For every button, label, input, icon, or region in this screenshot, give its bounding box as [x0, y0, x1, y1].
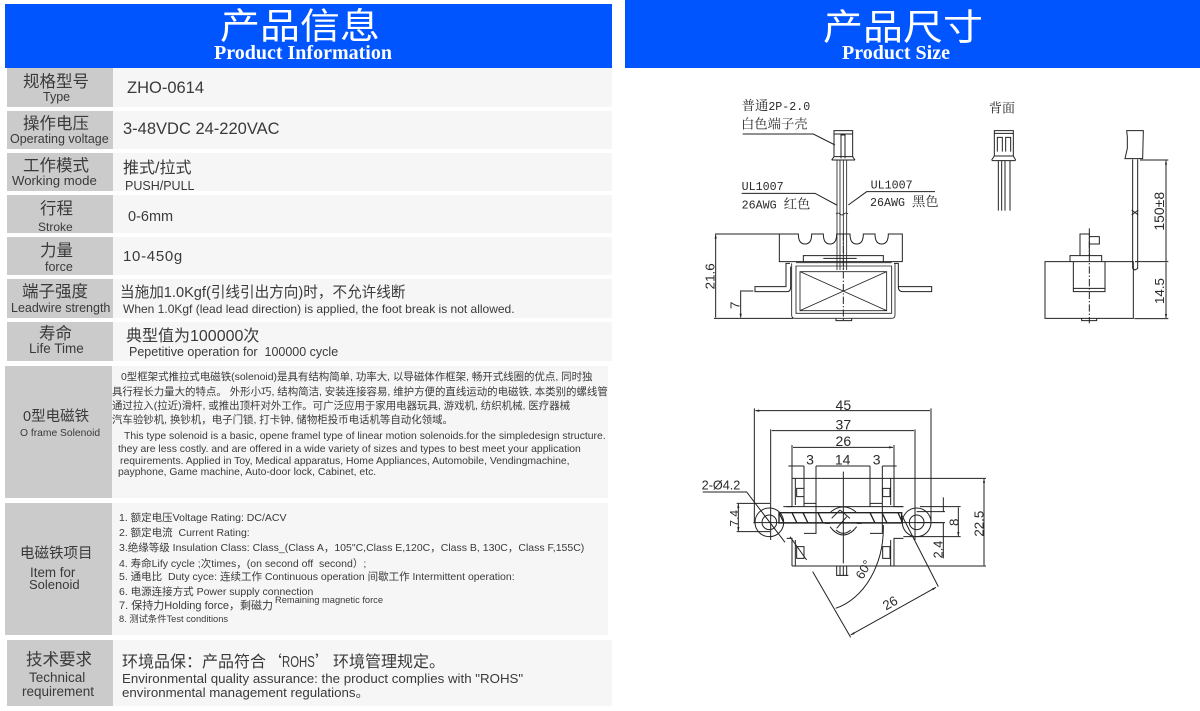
wires [836, 160, 848, 270]
list of items: Remaining magnetic force [275, 595, 383, 605]
frame and coil [755, 263, 932, 318]
row: life time: 典型值为100000次 [126, 328, 259, 345]
dimension: 45, 37, 26, 3, 14: 3 [873, 451, 881, 467]
row: leadwire strength [7, 279, 612, 318]
hatched bar and plunger [753, 472, 943, 563]
row: stroke: 0-6mm [128, 209, 173, 225]
row: type: 规格型号 [23, 73, 89, 91]
dimension: 45, 37, 26, 3, 14: 37 [836, 416, 851, 432]
dimension: 21.6 and 7: 7 [727, 302, 742, 309]
dimension: 21.6 and 7 [703, 234, 793, 318]
list of items: 5. 通电比 Duty cyce: 连续工作 Continuous operation 间歇工作 Intermittent operation: [119, 571, 515, 583]
row: technical requirement: Environmental quality assurance: the product complies with "ROHS" [122, 671, 523, 686]
row: operating voltage: 操作电压 [23, 115, 89, 133]
dimension: 22.5, 8, 2.4 [894, 478, 986, 566]
list of items: 2. 额定电流 Current Rating: [119, 527, 250, 539]
back connector [992, 131, 1016, 211]
row: life time: Pepetitive operation for 100000 cycle [129, 345, 338, 359]
dimension: 22.5, 8, 2.4: 8 [946, 519, 961, 526]
row: operating voltage: Operating voltage [10, 132, 109, 146]
label: terminal housing: 普通2P-2.0 [742, 95, 810, 114]
description text [112, 371, 608, 478]
mounting ears [755, 508, 931, 537]
row: technical requirement: ROHS [282, 654, 315, 671]
dimension: 150 and 14.5 [1134, 160, 1168, 319]
dimension: 45, 37, 26, 3, 14: 3 [806, 451, 814, 467]
row: item for solenoid: Item for [30, 565, 75, 580]
dimension: hole and 7.4: 2-Ø4.2 [702, 478, 740, 492]
label: black wire: UL1007 [871, 178, 913, 192]
dimension: hole and 7.4: 7.4 [727, 510, 741, 527]
row: technical requirement: Technical [29, 670, 85, 685]
panel: product size header: Product Size [842, 42, 950, 64]
description text: This type solenoid is a basic, opene framel type of linear motion solenoids.for the simpledesign structure. [124, 431, 606, 442]
row: life time: Life Time [29, 341, 84, 356]
row: technical requirement [7, 640, 612, 706]
list of items [119, 512, 584, 624]
dimension: 45, 37, 26, 3, 14: 45 [836, 397, 851, 413]
row: technical requirement: 环境品保：产品符合 环境管理规定。 [122, 654, 445, 671]
label: terminal housing: 白色端子壳 [741, 113, 808, 132]
dimension: 45, 37, 26, 3, 14: 14 [835, 451, 851, 467]
row: technical requirement: 技术要求 [26, 651, 92, 669]
dimension: 150 and 14.5: 150±8 [1151, 192, 1167, 231]
label: terminal housing [741, 95, 835, 145]
dimension: 22.5, 8, 2.4: 2.4 [931, 541, 945, 558]
label: black wire: 26AWG 黑色 [870, 191, 939, 210]
label: black wire [848, 178, 939, 210]
dimension: 150 and 14.5: 14.5 [1152, 278, 1167, 304]
row: technical requirement: ’ [315, 648, 331, 672]
description text: 汽车验钞机, 换钞机，电子门锁, 打卡钟, 储物柜投币电话机等自动化领域。 [112, 415, 453, 426]
dimension: 21.6 and 7: 21.6 [703, 263, 718, 289]
label: red wire: UL1007 [742, 180, 784, 194]
drawing: back and side views [989, 98, 1168, 323]
row: item for solenoid: 电磁铁项目 [20, 546, 92, 562]
list of items: 7. 保持力Holding force，剩磁力 [119, 600, 273, 612]
panel: product information header: Product Information [214, 42, 392, 64]
side block [1045, 228, 1133, 323]
row: leadwire strength: 当施加1.0Kgf(引线引出方向)时，不允许线断 [120, 285, 405, 301]
row: force: 力量 [40, 242, 73, 260]
dimension: 45, 37, 26, 3, 14 [754, 397, 931, 540]
row: force: 10-450g [123, 248, 183, 265]
row: O frame solenoid: O frame Solenoid [20, 428, 100, 439]
row: life time: 寿命 [39, 325, 72, 343]
row: working mode: 工作模式 [23, 157, 89, 175]
row: stroke: 行程 [40, 200, 73, 218]
row: O frame solenoid [5, 366, 608, 498]
row: item for solenoid [5, 503, 608, 635]
row: leadwire strength: When 1.0Kgf (lead lead direction) is applied, the foot break is not allowed. [123, 302, 515, 316]
body outline [787, 466, 903, 576]
description text: 通过拉入(拉近)滑杆, 或推出顶杆对外工作。可广泛应用于家用电器玩具, 游戏机, 纺织机械, 医疗器械 [112, 401, 570, 412]
bobbin top [779, 234, 902, 262]
description text: 具行程长力量大的特点。 外形小巧, 结构简洁, 安装连接容易, 维护方便的直线运动的电磁铁, 本类别的螺线管 [112, 387, 608, 398]
row: type: Type [43, 90, 70, 104]
description text: requirements. Applied in Toy, Medical apparatus, Home Appliances, Automobile, Vendingmachine, [120, 456, 570, 467]
drawing: front view [703, 95, 939, 322]
row: technical requirement: ‘ [266, 648, 282, 672]
panel: product size header [625, 0, 1200, 68]
centerline and nub [836, 233, 852, 322]
panel: product information header [5, 4, 612, 68]
description text: 0型框架式推拉式电磁铁(solenoid)是具有结构简单, 功率大, 以导磁体作框架, 畅开式线圈的优点, 同时独 [121, 372, 592, 383]
description text: they are less costly. and are offered in a wide variety of sizes and types to best meet your application [118, 444, 581, 455]
row: working mode: 推式/拉式 [123, 160, 191, 177]
list of items: 8. 测试条件Test conditions [119, 614, 228, 624]
row: leadwire strength: Leadwire strength [11, 301, 110, 315]
row: operating voltage: 3-48VDC 24-220VAC [123, 120, 280, 138]
list of items: 4. 寿命Lify cycle ;次times，(on second off second）; [119, 558, 366, 570]
row: operating voltage [7, 111, 612, 149]
row: stroke: Stroke [38, 220, 73, 234]
dimension: 22.5, 8, 2.4: 22.5 [971, 511, 986, 537]
row: type [7, 68, 612, 107]
list of items: 6. 电源连接方式 Power supply connection [119, 586, 313, 598]
row: O frame solenoid: 0型电磁铁 [23, 409, 89, 425]
row: working mode [7, 153, 612, 191]
dimension: hole and 7.4 [702, 478, 785, 542]
side connector [1125, 131, 1143, 270]
row: item for solenoid: Solenoid [29, 577, 80, 592]
row: working mode: PUSH/PULL [125, 179, 194, 193]
label: red wire: 26AWG 红色 [742, 193, 810, 212]
drawing: top view [702, 397, 986, 637]
dimension: 60 degrees and 26: 26 [880, 593, 900, 613]
row: technical requirement: environmental management regulations。 [122, 685, 369, 700]
connector [832, 131, 855, 160]
row: technical requirement: requirement [22, 684, 94, 699]
list of items: 3.绝缘等级 Insulation Class: Class_(Class A，105"C,Class E,120C，Class B, 130C，Class F,155C) [119, 542, 584, 554]
label: back: 背面 [989, 98, 1015, 117]
row: force: force [45, 260, 73, 274]
description text: payphone, Game machine, Auto-door lock, Cabinet, etc. [118, 467, 376, 478]
list of items: 1. 额定电压Voltage Rating: DC/ACV [119, 512, 286, 524]
row: stroke [7, 195, 612, 233]
dimension: 60 degrees and 26 [790, 515, 938, 637]
row: leadwire strength: 端子强度 [22, 283, 88, 301]
label: red wire [742, 180, 837, 212]
row: life time [7, 322, 612, 361]
row: type: ZHO-0614 [127, 79, 204, 97]
row: working mode: Working mode [12, 173, 97, 188]
row: force [7, 237, 612, 275]
dimension: 45, 37, 26, 3, 14: 26 [836, 433, 851, 449]
dimension: 60 degrees and 26: 60° [853, 558, 875, 581]
